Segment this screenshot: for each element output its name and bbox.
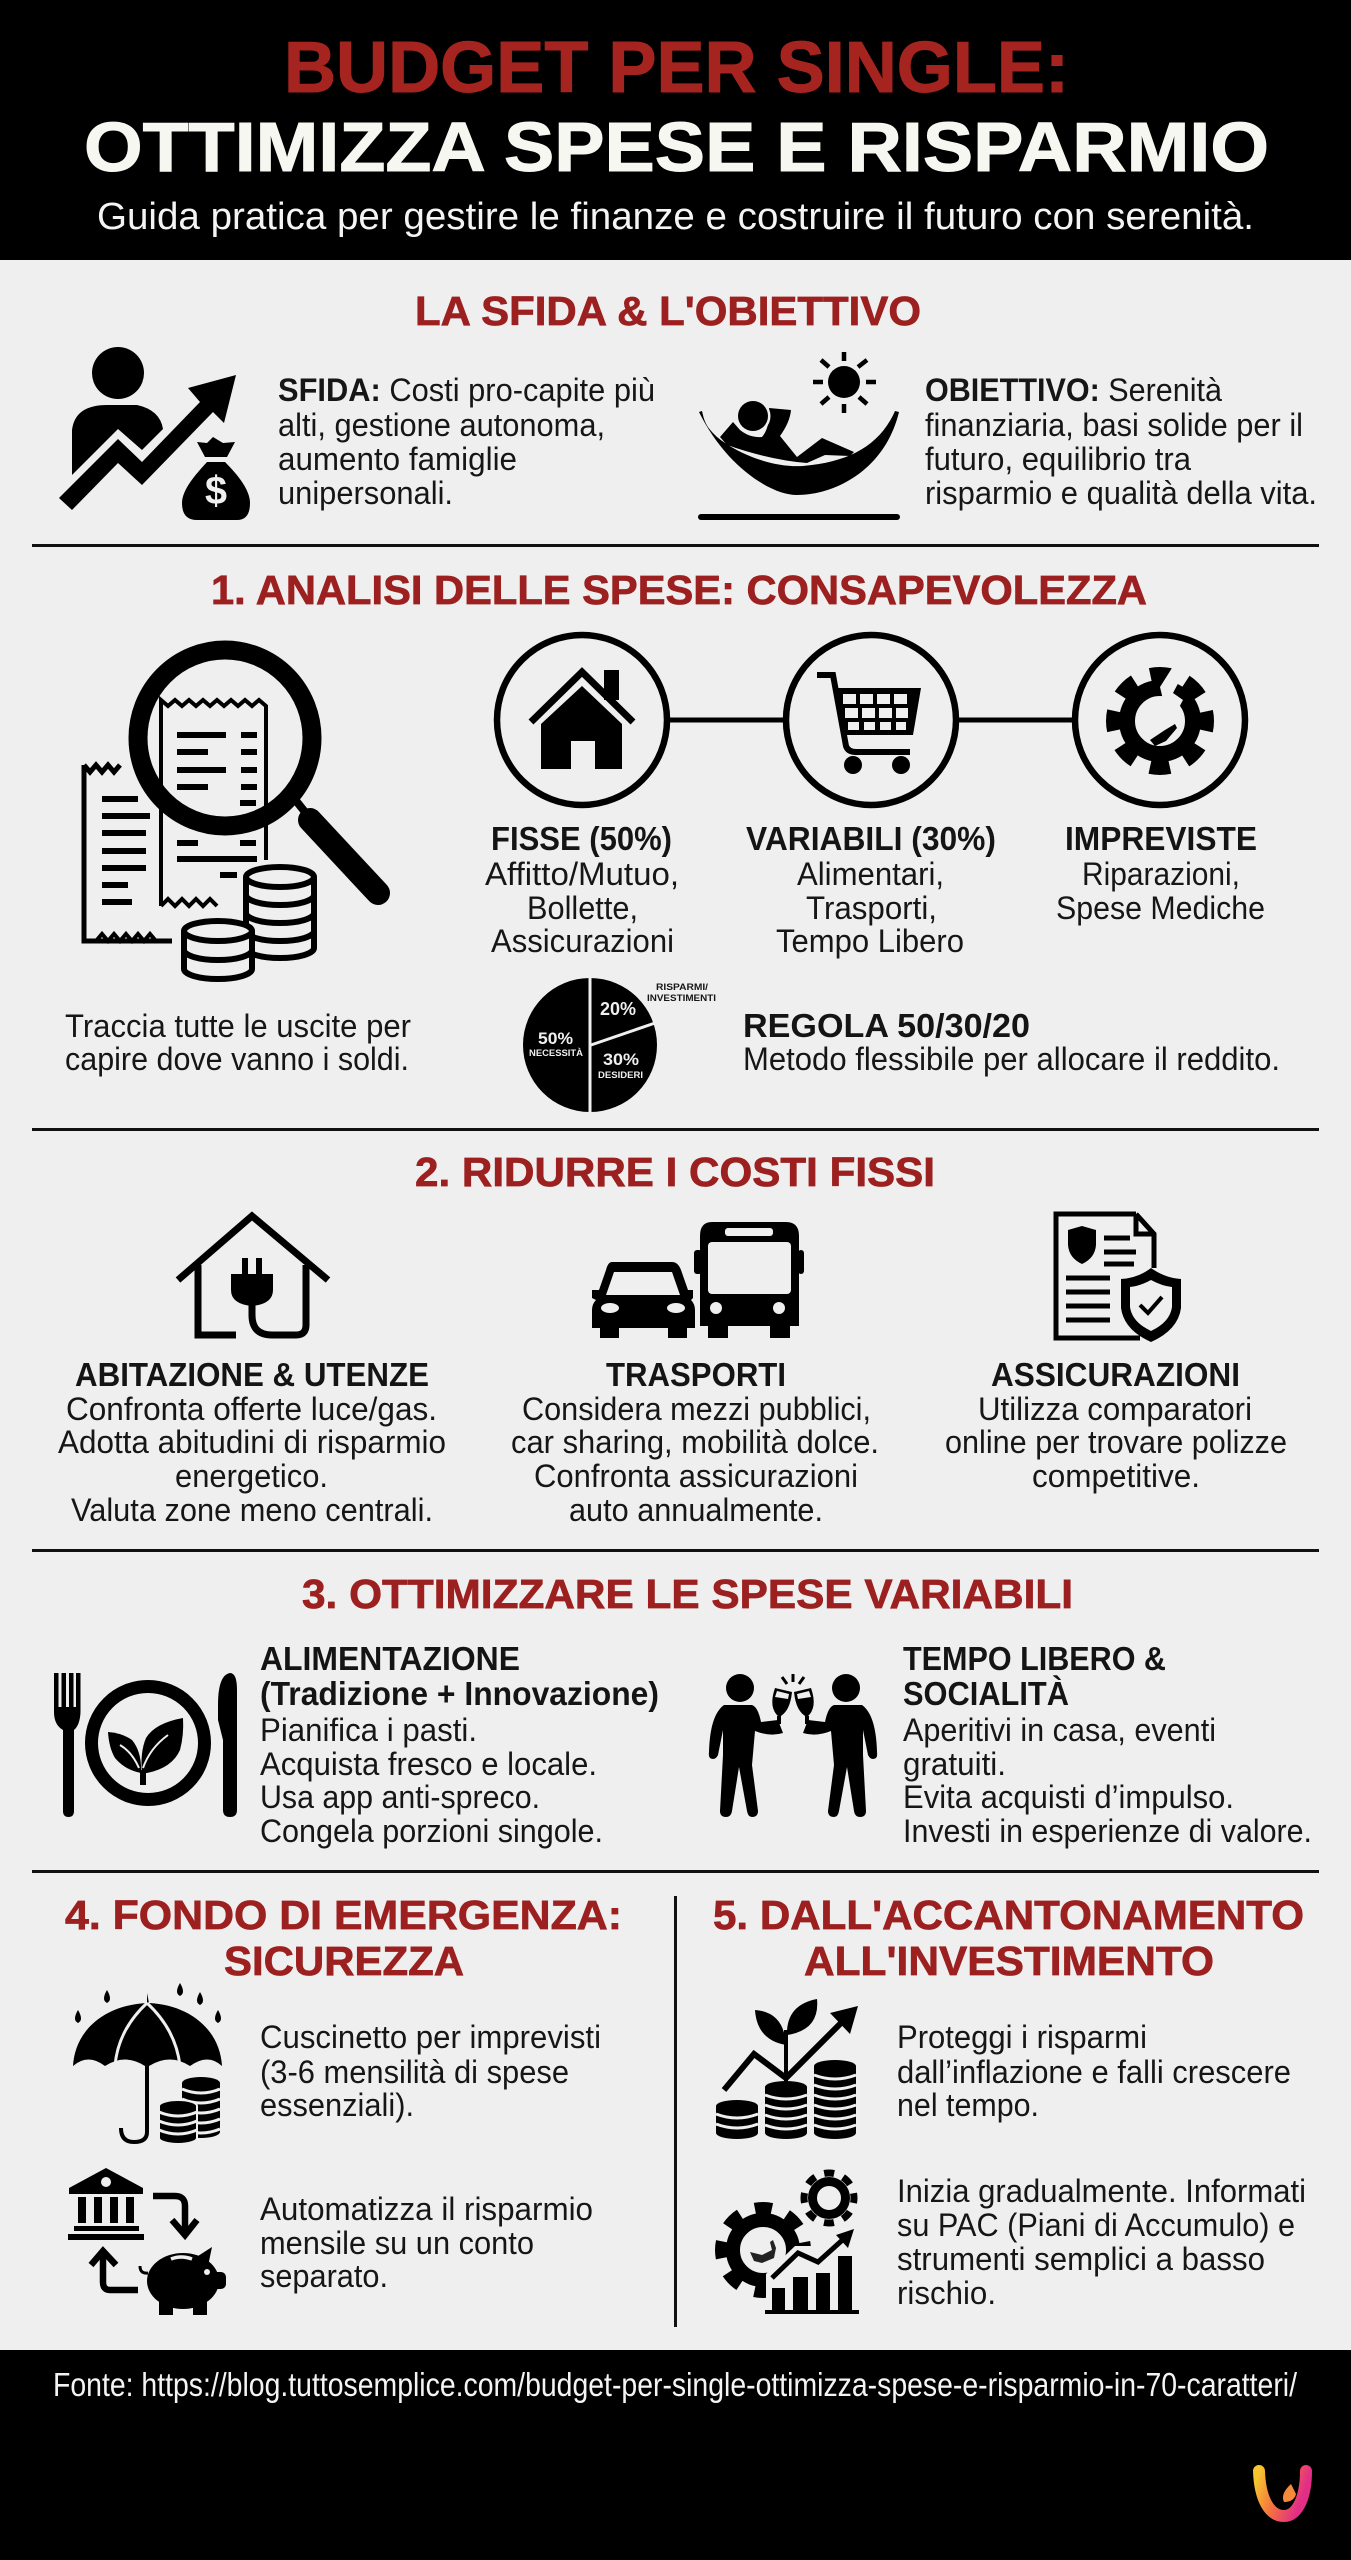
text: tempo libero e socialità: Investi in esperienze di valore. — [903, 1813, 1312, 1849]
text: assicurazioni: Utilizza comparatori — [978, 1391, 1252, 1427]
text: alimentazione — [260, 1640, 659, 1849]
text: cuscinetto: essenziali). — [260, 2087, 414, 2123]
text: traccia le uscite: capire dove vanno i soldi. — [65, 1041, 409, 1077]
chart: pie 50/30/20: 50% — [538, 1029, 573, 1048]
chart: pie 50/30/20: INVESTIMENTI — [647, 993, 716, 1003]
heading — [65, 1892, 622, 1984]
text: traccia le uscite — [65, 1008, 411, 1077]
text: abitazione e utenze: ABITAZIONE & UTENZE — [75, 1356, 429, 1393]
text: obiettivo: risparmio e qualità della vita. — [925, 475, 1317, 511]
chart: pie 50/30/20: 20% — [600, 999, 636, 1019]
text: assicurazioni: online per trovare polizze — [945, 1424, 1287, 1460]
text: traccia le uscite: Traccia tutte le uscite per — [65, 1008, 411, 1044]
text: trasporti — [511, 1356, 879, 1528]
connector lines — [669, 718, 1073, 722]
text: assicurazioni: competitive. — [1032, 1458, 1200, 1494]
text: trasporti: TRASPORTI — [606, 1356, 786, 1393]
icon: house with plug — [178, 1216, 328, 1335]
text: inizia gradualmente: Inizia gradualmente. Informati — [897, 2173, 1306, 2209]
label: impreviste: Spese Mediche — [1056, 890, 1265, 926]
text: proteggi i risparmi: nel tempo. — [897, 2087, 1039, 2123]
text: inizia gradualmente — [897, 2173, 1306, 2311]
heading: ALL'INVESTIMENTO — [804, 1938, 1214, 1984]
text: inizia gradualmente: strumenti semplici a basso — [897, 2241, 1265, 2277]
text: sfida: alti, gestione autonoma, — [278, 407, 605, 443]
text: trasporti: Considera mezzi pubblici, — [522, 1391, 871, 1427]
icon: person relaxing in hammock under sun — [698, 352, 900, 520]
text: abitazione e utenze: Valuta zone meno centrali. — [71, 1492, 433, 1528]
chart: pie 50/30/20: 30% — [603, 1050, 639, 1069]
label: fisse: FISSE (50%) — [491, 820, 672, 857]
text: tempo libero e socialità: Evita acquisti d’impulso. — [903, 1779, 1234, 1815]
text: abitazione e utenze — [58, 1356, 446, 1528]
chart: pie 50/30/20: NECESSITÀ — [529, 1048, 584, 1058]
header banner — [0, 0, 1351, 260]
panel: 4. fondo di emergenza — [65, 1892, 622, 2315]
label: fisse: Affitto/Mutuo, — [485, 856, 679, 892]
chart: pie 50/30/20: DESIDERI — [598, 1070, 643, 1080]
panel: 2. ridurre i costi fissi — [58, 1149, 1287, 1528]
icon: person with rising arrow and money bag — [59, 347, 250, 520]
text: sfida: aumento famiglie — [278, 441, 517, 477]
text: inizia gradualmente: su PAC (Piani di Accumulo) e — [897, 2207, 1295, 2243]
text: automatizza: mensile su un conto — [260, 2225, 534, 2261]
label: variabili: VARIABILI (30%) — [746, 820, 996, 857]
panel: la sfida e l'obiettivo — [59, 288, 1317, 520]
heading: 4. FONDO DI EMERGENZA: — [65, 1892, 622, 1938]
logo — [1259, 2471, 1306, 2516]
icon: plant, rising arrow and coins — [716, 1999, 858, 2139]
icon: car and bus — [592, 1222, 804, 1338]
icon: insurance document with shield — [1056, 1214, 1181, 1342]
footer band — [0, 2350, 1351, 2560]
text: inizia gradualmente: rischio. — [897, 2275, 996, 2311]
label: variabili: Trasporti, — [806, 890, 937, 926]
text: automatizza: separato. — [260, 2258, 388, 2294]
heading: 3. OTTIMIZZARE LE SPESE VARIABILI — [302, 1571, 1073, 1617]
heading: 2. RIDURRE I COSTI FISSI — [415, 1149, 935, 1195]
text: proteggi i risparmi: Proteggi i risparmi — [897, 2019, 1147, 2055]
chart: pie 50/30/20 — [523, 975, 716, 1115]
text: obiettivo: OBIETTIVO: Serenità — [925, 372, 1222, 408]
text: trasporti: Confronta assicurazioni — [534, 1458, 858, 1494]
text: sfida — [278, 372, 655, 511]
text: abitazione e utenze: energetico. — [175, 1458, 328, 1494]
text: alimentazione: Acquista fresco e locale. — [260, 1746, 597, 1782]
text: automatizza: Automatizza il risparmio — [260, 2191, 593, 2227]
text: tempo libero e socialità: Aperitivi in casa, eventi — [903, 1712, 1216, 1748]
text: tempo libero e socialità: TEMPO LIBERO & — [903, 1640, 1166, 1677]
text: sfida: SFIDA: Costi pro-capite più — [278, 372, 655, 408]
text: cuscinetto — [260, 2019, 601, 2123]
panel: 3. ottimizzare le spese variabili — [54, 1571, 1312, 1849]
heading: 5. DALL'ACCANTONAMENTO — [713, 1892, 1304, 1938]
label: impreviste: Riparazioni, — [1082, 856, 1240, 892]
icon: house in circle — [497, 635, 667, 805]
text: alimentazione: Usa app anti-spreco. — [260, 1779, 540, 1815]
text: abitazione e utenze: Confronta offerte luce/gas. — [66, 1391, 437, 1427]
text: proteggi i risparmi — [897, 2019, 1291, 2123]
label: fisse: Bollette, — [527, 890, 638, 926]
text: tempo libero e socialità — [903, 1640, 1312, 1849]
text: cuscinetto: Cuscinetto per imprevisti — [260, 2019, 601, 2055]
text: alimentazione: Pianifica i pasti. — [260, 1712, 477, 1748]
chart: pie 50/30/20: RISPARMI/ — [656, 982, 709, 992]
text: abitazione e utenze: Adotta abitudini di risparmio — [58, 1424, 446, 1460]
text: automatizza — [260, 2191, 593, 2294]
label: variabili: Alimentari, — [797, 856, 944, 892]
text: regola 50/30/20 — [743, 1007, 1280, 1077]
icon: shopping cart in circle — [786, 635, 956, 805]
text: obiettivo: finanziaria, basi solide per il — [925, 407, 1303, 443]
text: obiettivo — [925, 372, 1317, 511]
text: alimentazione: ALIMENTAZIONE — [260, 1640, 520, 1677]
icon: two people toasting — [709, 1674, 877, 1817]
text: tempo libero e socialità: gratuiti. — [903, 1746, 1006, 1782]
panel: 1. analisi delle spese — [65, 567, 1280, 1115]
label: fisse — [485, 820, 679, 959]
icon: gears with growth chart — [721, 2173, 859, 2320]
text: assicurazioni — [945, 1356, 1287, 1494]
icon: broken gear in circle — [1075, 635, 1245, 805]
panel: 5. dall'accantonamento all'investimento — [713, 1892, 1306, 2320]
label: variabili: Tempo Libero — [776, 923, 964, 959]
icon: magnifier over receipts and coins — [84, 650, 378, 979]
title line 1: BUDGET PER SINGLE: — [284, 28, 1069, 108]
text: alimentazione: (Tradizione + Innovazione) — [260, 1675, 659, 1712]
text: assicurazioni: ASSICURAZIONI — [991, 1356, 1240, 1393]
subtitle: Guida pratica per gestire le finanze e costruire il futuro con serenità. — [97, 196, 1254, 238]
label: impreviste: IMPREVISTE — [1065, 820, 1257, 857]
icon: bank, arrows and piggy bank — [68, 2168, 226, 2315]
text: alimentazione: Congela porzioni singole. — [260, 1813, 603, 1849]
icon: person with rising arrow and money bag: $ — [205, 469, 227, 513]
icon: fork, plate with leaves, knife — [54, 1673, 237, 1817]
heading — [713, 1892, 1304, 1984]
heading: SICUREZZA — [224, 1938, 464, 1984]
text: regola 50/30/20: Metodo flessibile per allocare il reddito. — [743, 1041, 1280, 1077]
icon: umbrella with rain and coins — [73, 1983, 222, 2144]
heading: 1. ANALISI DELLE SPESE: CONSAPEVOLEZZA — [211, 567, 1147, 613]
text: proteggi i risparmi: dall’inflazione e falli crescere — [897, 2054, 1291, 2090]
text: trasporti: car sharing, mobilità dolce. — [511, 1424, 879, 1460]
text: tempo libero e socialità: SOCIALITÀ — [903, 1675, 1069, 1712]
label: impreviste — [1056, 820, 1265, 926]
text: obiettivo: futuro, equilibrio tra — [925, 441, 1191, 477]
text: regola 50/30/20: REGOLA 50/30/20 — [743, 1007, 1030, 1044]
heading: LA SFIDA & L'OBIETTIVO — [415, 288, 921, 334]
label: fisse: Assicurazioni — [491, 923, 674, 959]
title line 2: OTTIMIZZA SPESE E RISPARMIO — [84, 108, 1269, 186]
text: cuscinetto: (3-6 mensilità di spese — [260, 2054, 569, 2090]
label: variabili — [746, 820, 996, 959]
text: trasporti: auto annualmente. — [569, 1492, 823, 1528]
text: sfida: unipersonali. — [278, 475, 453, 511]
